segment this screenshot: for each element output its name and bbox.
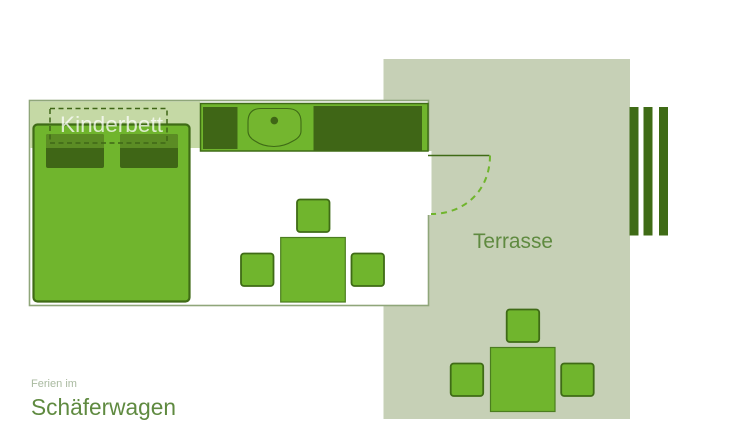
panel: wagon floor xyxy=(30,100,432,306)
kitchen counter xyxy=(200,104,428,151)
door leaf xyxy=(428,154,490,156)
steps xyxy=(630,107,668,236)
chair right xyxy=(561,364,594,396)
terrace table with chairs xyxy=(451,310,594,412)
chair top xyxy=(507,310,539,342)
title: Schäferwagen xyxy=(31,394,176,420)
chair left xyxy=(451,364,483,396)
bed xyxy=(34,124,190,302)
label: Kinderbett: Kinderbett xyxy=(60,112,163,137)
label: Terrasse: Terrasse xyxy=(473,230,553,253)
panel: terrace area xyxy=(384,59,630,419)
subtitle: Ferien im xyxy=(31,378,77,390)
sink drain xyxy=(270,117,278,124)
pillow right xyxy=(120,134,178,168)
chair top xyxy=(297,200,330,232)
sink xyxy=(248,108,301,146)
children's bed dashed outline xyxy=(50,108,167,143)
table xyxy=(490,348,555,412)
pillow left xyxy=(46,134,104,168)
chair right xyxy=(352,254,384,286)
stove block xyxy=(203,107,238,149)
chair left xyxy=(241,254,274,286)
table xyxy=(281,238,345,302)
counter block xyxy=(314,106,422,150)
door swing arc xyxy=(431,156,490,214)
indoor table with chairs xyxy=(241,200,384,302)
